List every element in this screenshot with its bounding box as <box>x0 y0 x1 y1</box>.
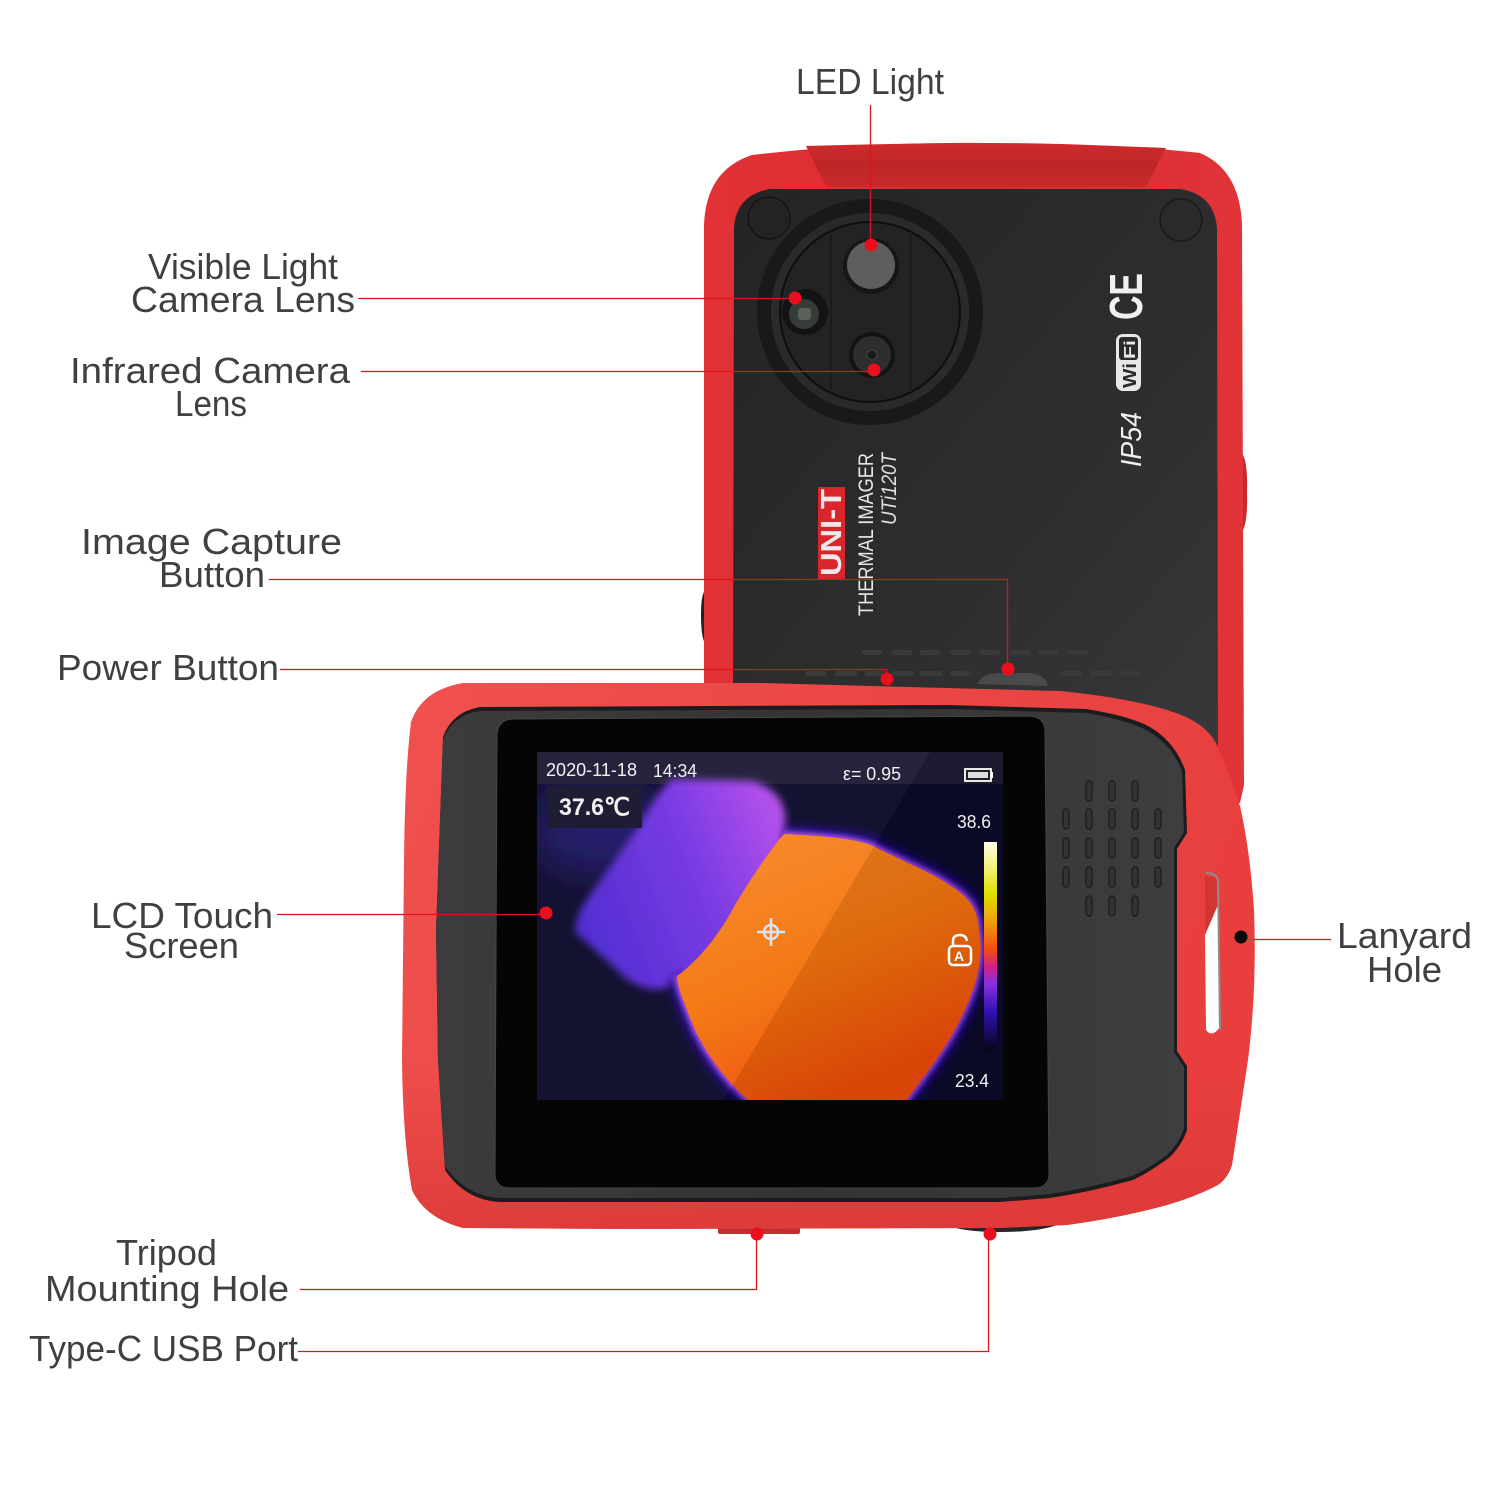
callout: LCD touch screen <box>91 895 552 966</box>
front rubber case <box>402 683 1255 1229</box>
orange heat zone <box>677 834 981 1102</box>
date and time: 14:34 <box>653 761 697 781</box>
callout: infrared camera lens: Lens <box>175 383 247 424</box>
case top recess <box>806 143 1166 187</box>
orange zone purple edge <box>677 834 981 1102</box>
lower case shading <box>402 1060 1245 1229</box>
lens inner disc <box>780 222 960 402</box>
callout: LED light: LED Light <box>796 61 944 102</box>
lcd thermal image <box>530 752 1003 1102</box>
back rubber case <box>704 143 1244 803</box>
callout: LCD touch screen: Screen <box>124 925 239 966</box>
callout: image capture button <box>81 521 1014 676</box>
battery icon <box>965 769 993 781</box>
WiFi badge <box>1116 334 1141 391</box>
back side power key <box>1240 452 1247 534</box>
emissivity value: ε= 0.95 <box>843 764 901 784</box>
tripod mount bump <box>718 1224 800 1234</box>
LED window <box>843 238 899 294</box>
callout: image capture button: Button <box>159 554 265 595</box>
callout: visible light camera lens <box>131 246 802 320</box>
visible light camera lens <box>782 289 828 335</box>
metal wire <box>1206 873 1220 1030</box>
WiFi badge: Fi <box>1122 340 1139 359</box>
callout: type-C USB port: Type-C USB Port <box>29 1328 298 1369</box>
orange zone blue halo <box>677 834 981 1102</box>
lens module <box>757 199 983 425</box>
corner screw cover left <box>748 197 790 239</box>
callout: infrared camera lens <box>70 350 880 424</box>
lens middle ring <box>771 213 969 411</box>
callout: image capture button: Image Capture <box>81 521 342 562</box>
callout: LED light <box>796 61 944 252</box>
callout: power button: Power Button <box>57 647 279 688</box>
UNI-T logo: UNI-T <box>816 489 848 576</box>
callout: visible light camera lens: Camera Lens <box>131 279 355 320</box>
right side shadow <box>728 840 984 1100</box>
WiFi badge: Wi <box>1120 363 1140 388</box>
back left side key <box>701 590 706 644</box>
lcd upper left tint <box>530 785 670 875</box>
CE mark: CE <box>1100 273 1152 320</box>
front grey bezel <box>436 709 1184 1198</box>
callout: power button <box>57 647 894 688</box>
screen glare <box>537 752 930 1100</box>
callout: tripod mounting hole <box>45 1228 764 1309</box>
callout: tripod mounting hole: Tripod <box>116 1232 217 1273</box>
thermal imager label: THERMAL IMAGER <box>855 453 878 616</box>
date and time <box>546 763 697 777</box>
model label: UTi120T <box>878 451 901 525</box>
front black inner rim <box>436 705 1187 1202</box>
callout: lanyard hole: Hole <box>1367 949 1442 990</box>
auto lock icon <box>949 935 971 965</box>
lens outer ring <box>757 199 983 425</box>
temperature readout <box>547 786 642 828</box>
disc centre strip dividers <box>831 234 911 390</box>
image capture button <box>978 673 1048 686</box>
date and time: 2020-11-18 <box>546 760 637 780</box>
callout: lanyard hole: Lanyard <box>1337 915 1472 956</box>
lcd status strip <box>537 752 1003 784</box>
slot inner shadow <box>1205 876 1218 935</box>
crosshair icon <box>757 918 785 946</box>
speaker grille <box>1063 781 1161 916</box>
callout: infrared camera lens: Infrared Camera <box>70 350 351 391</box>
purple heat zone <box>575 779 786 990</box>
callout: LCD touch screen: LCD Touch <box>91 895 273 936</box>
infrared camera lens <box>849 332 895 378</box>
callout: type-C USB port <box>29 1228 996 1369</box>
black touch screen glass <box>495 716 1049 1188</box>
callout: tripod mounting hole: Mounting Hole <box>45 1268 289 1309</box>
callout: visible light camera lens: Visible Light <box>148 246 338 287</box>
maximum scale value: 38.6 <box>957 812 991 832</box>
back black panel <box>733 189 1218 760</box>
lanyard slot <box>1205 873 1220 1034</box>
colour scale bar <box>984 842 997 1050</box>
corner screw cover right <box>1160 199 1202 241</box>
USB port bump <box>945 1224 1060 1232</box>
slot opening <box>1205 905 1219 1034</box>
back vents <box>805 650 1142 676</box>
lcd background <box>537 752 1003 1100</box>
minimum scale value: 23.4 <box>955 1071 989 1091</box>
auto lock icon: A <box>954 948 964 964</box>
temperature readout: 37.6℃ <box>559 794 630 821</box>
back view of thermal imager <box>701 143 1247 803</box>
callout: lanyard hole <box>1234 915 1472 990</box>
front view of thermal imager <box>402 683 1255 1234</box>
IP54 mark: IP54 <box>1116 412 1148 467</box>
